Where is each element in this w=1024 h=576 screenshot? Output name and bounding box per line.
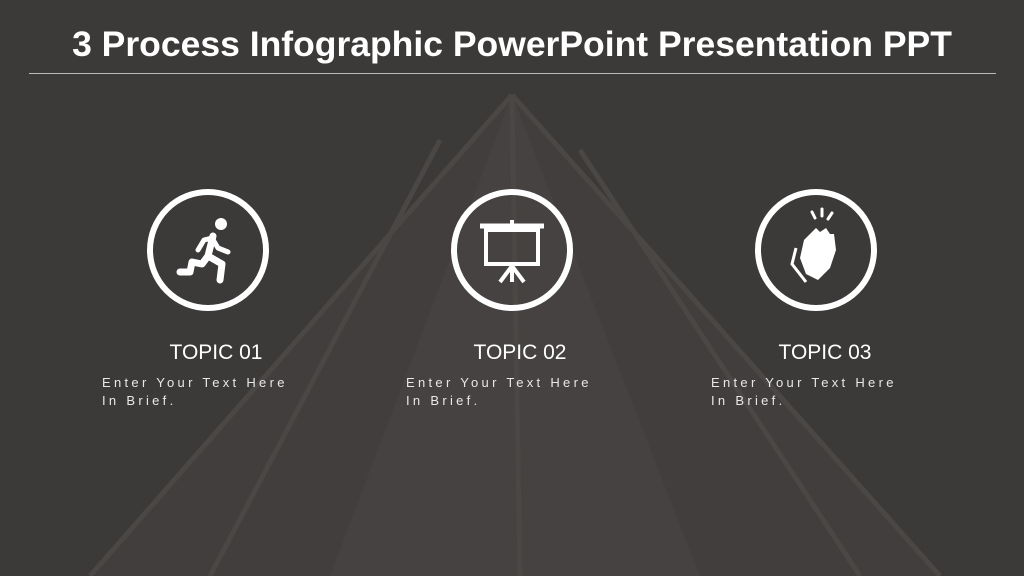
topic 3: TOPIC 03 (778, 341, 871, 364)
text 2: Enter Your Text Here (406, 375, 592, 390)
topic 1: TOPIC 01 (170, 341, 262, 364)
text 3: Enter Your Text Here (711, 375, 897, 390)
title: 3 Process Infographic PowerPoint Presentation PPT (72, 24, 952, 64)
text 3 (711, 375, 897, 408)
icon: clapping hands (755, 189, 877, 311)
text 1 (102, 375, 288, 408)
text 2 (406, 375, 592, 408)
text 1: Enter Your Text Here (102, 375, 288, 390)
text 2: In Brief. (406, 393, 480, 408)
topic 2: TOPIC 02 (474, 341, 566, 364)
text 1: In Brief. (102, 393, 176, 408)
icon: presentation board (451, 189, 573, 311)
icon: runner (147, 189, 269, 311)
text 3: In Brief. (711, 393, 786, 408)
